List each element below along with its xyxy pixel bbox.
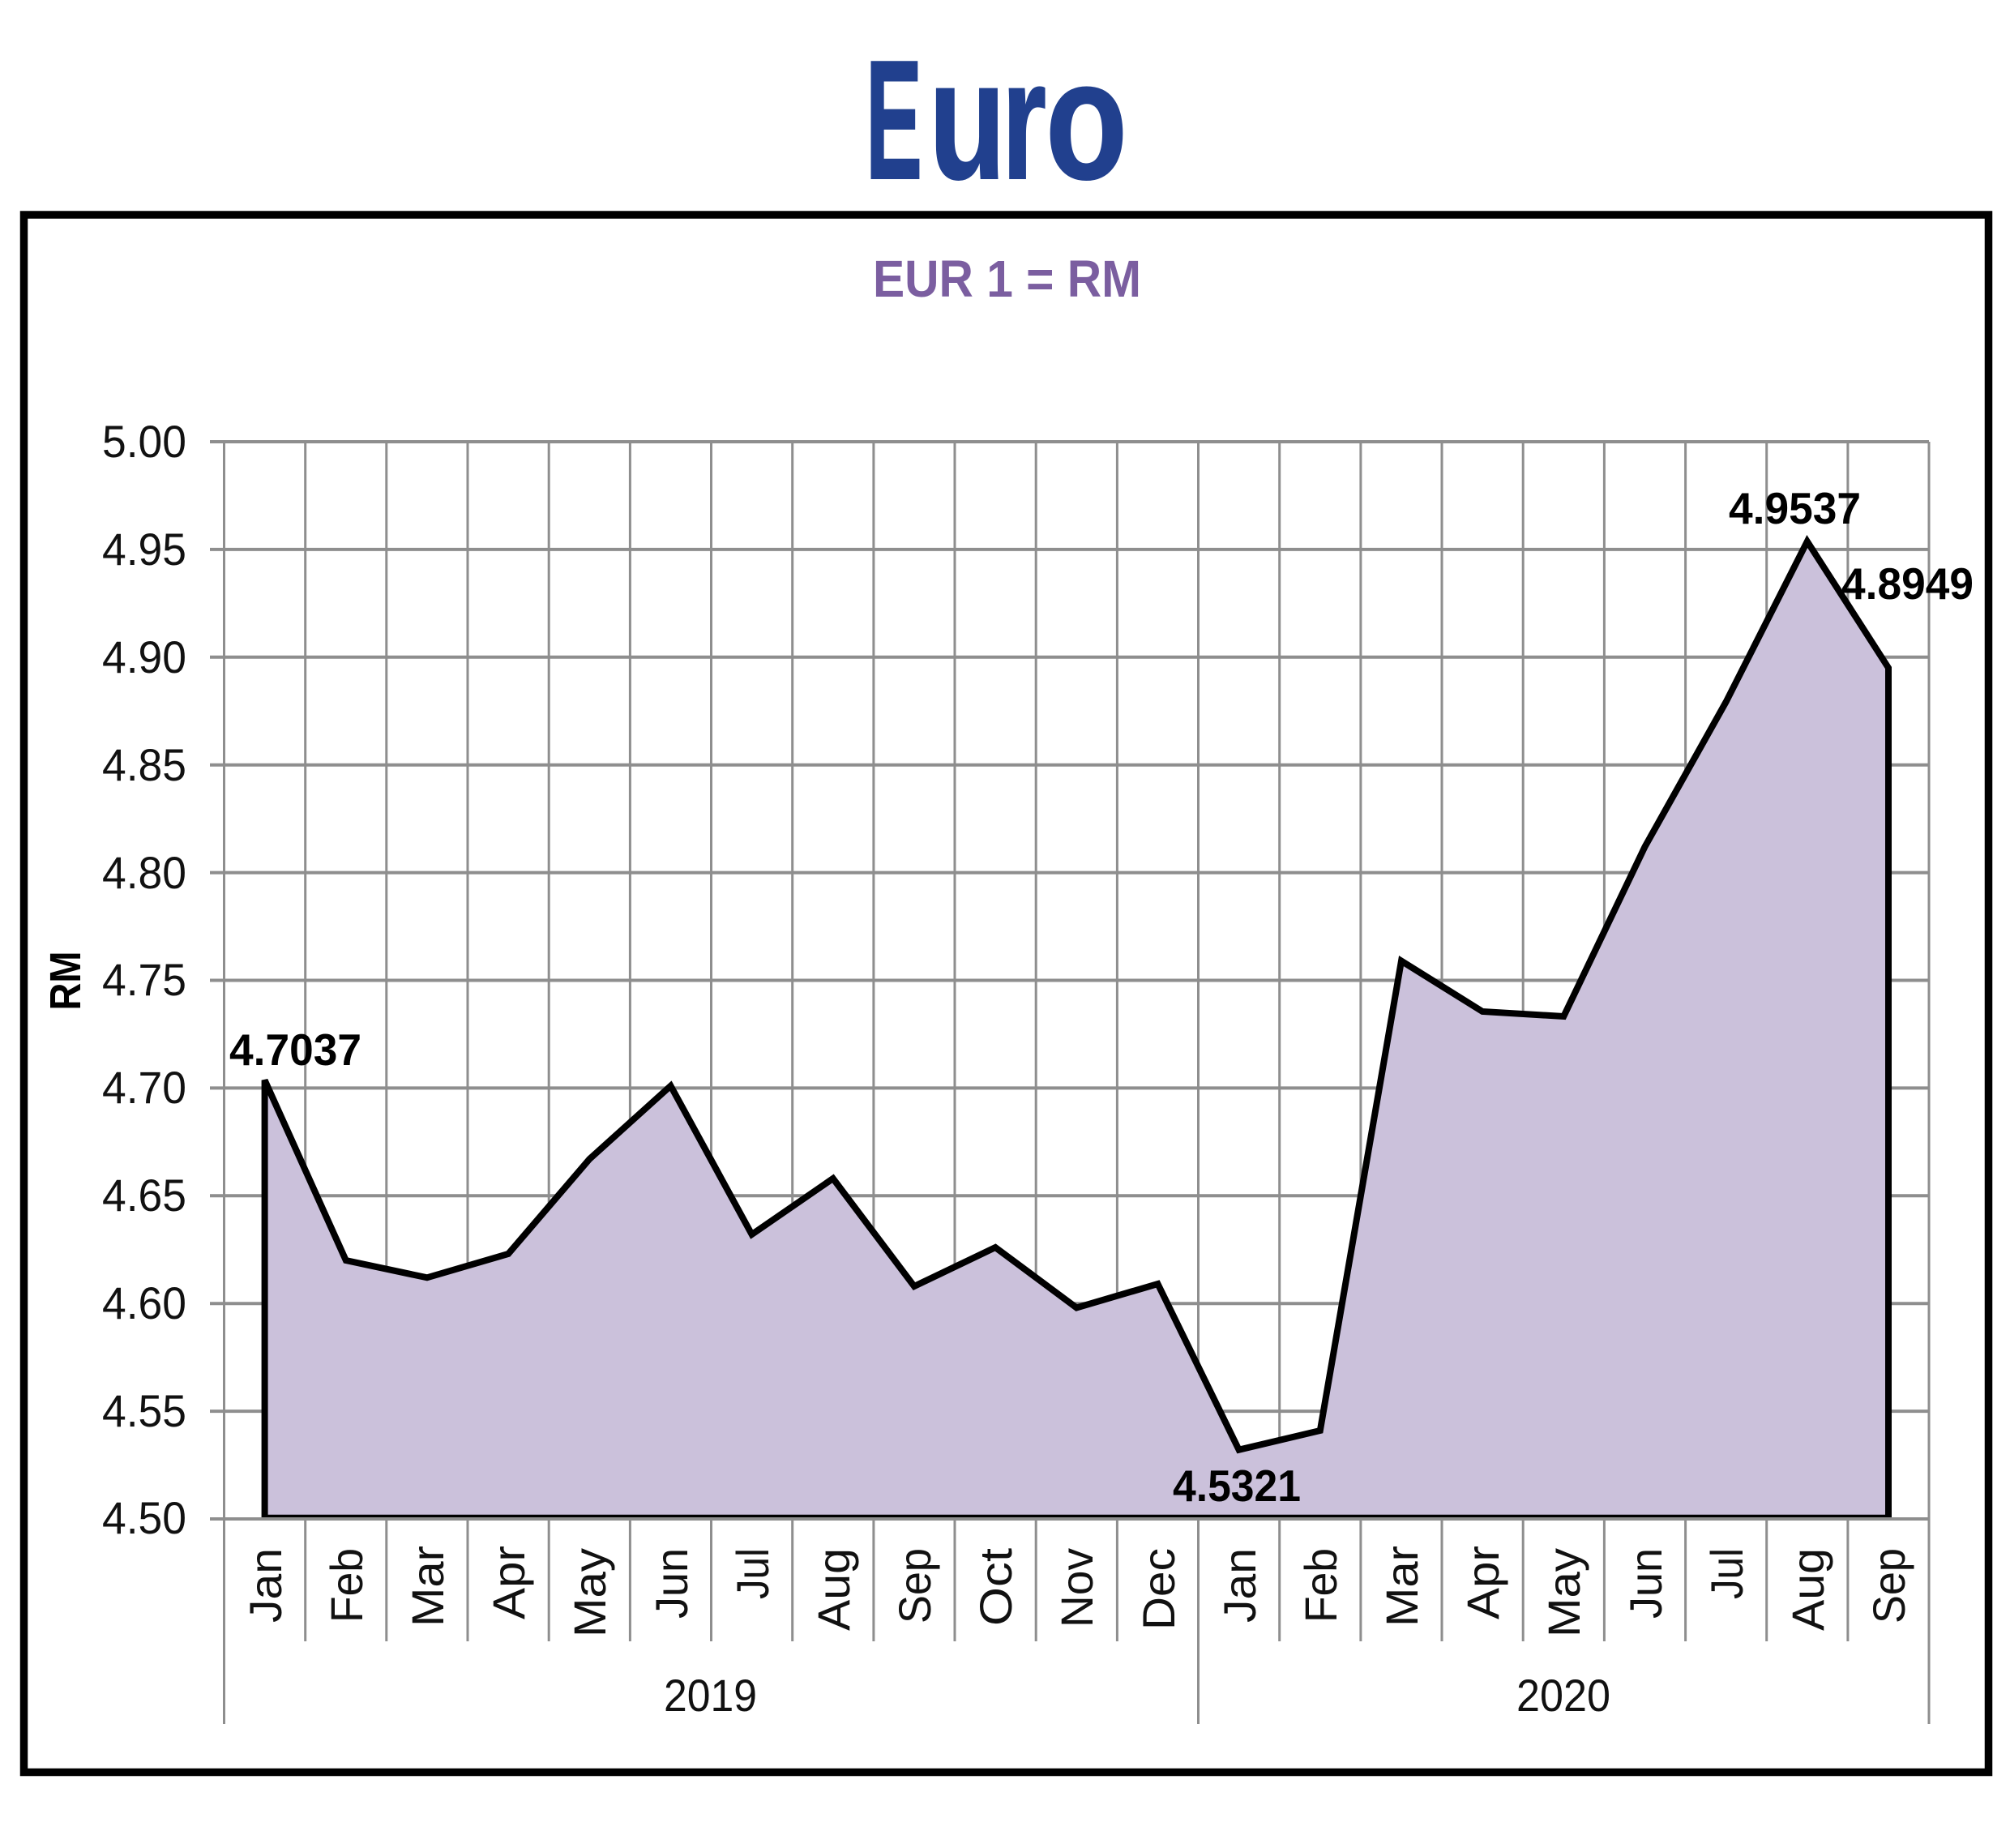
x axis month labels: Sep [889, 1548, 940, 1623]
y axis labels: 4.80 [102, 847, 186, 898]
x axis month labels: Jun [646, 1548, 697, 1619]
y axis labels: 4.70 [102, 1062, 186, 1113]
title: r [1002, 26, 1046, 215]
x axis month labels: Sep [1863, 1548, 1914, 1623]
x axis month labels: Mar [1376, 1546, 1427, 1627]
y axis labels: 4.55 [102, 1385, 186, 1436]
y axis labels: 4.85 [102, 739, 186, 790]
y axis title: RM [41, 952, 90, 1010]
x axis month labels: Aug [808, 1548, 859, 1631]
title: o [1046, 26, 1127, 215]
x axis month labels: Jan [1214, 1548, 1265, 1623]
y axis labels: 4.75 [102, 954, 186, 1005]
x axis baseline [210, 1517, 1929, 1521]
x axis month labels: Aug [1782, 1548, 1833, 1631]
x axis month labels: Jul [1701, 1548, 1752, 1599]
x axis month labels: Nov [1051, 1548, 1102, 1628]
x axis month labels: Jan [240, 1548, 291, 1623]
x axis month labels: Feb [321, 1548, 372, 1623]
y axis labels: 5.00 [102, 416, 186, 467]
x axis year labels [664, 1670, 1610, 1721]
x axis month labels: May [564, 1548, 615, 1637]
y axis labels [102, 416, 186, 1543]
chart gridlines [210, 442, 1929, 1724]
x axis month labels [240, 1546, 1914, 1637]
title: E [866, 26, 922, 215]
x axis month labels: Mar [402, 1546, 453, 1627]
x axis year labels: 2019 [664, 1670, 757, 1721]
title: u [929, 26, 1006, 215]
x axis month labels: Apr [1457, 1546, 1508, 1619]
y axis labels: 4.60 [102, 1277, 186, 1328]
y axis labels: 4.95 [102, 524, 186, 575]
x axis month labels: Jul [727, 1548, 778, 1599]
data label: Sep 2020: 4.8949 [1841, 558, 1974, 609]
subtitle: EUR 1 = RM [873, 250, 1141, 308]
y axis labels: 4.50 [102, 1492, 186, 1543]
x axis month labels: Feb [1295, 1548, 1346, 1623]
y axis labels: 4.65 [102, 1170, 186, 1221]
data label: Jan 2019: 4.7037 [229, 1025, 361, 1075]
y axis labels: 4.90 [102, 631, 186, 682]
area chart: EUR to RM rate [262, 541, 1892, 1517]
x axis month labels: Jun [1620, 1548, 1671, 1619]
data label: Jan 2020 low: 4.5321 [1173, 1461, 1301, 1511]
x axis month labels: May [1538, 1548, 1589, 1637]
x axis month labels: Oct [970, 1548, 1021, 1626]
x axis year labels: 2020 [1516, 1670, 1610, 1721]
x axis month labels: Dec [1133, 1548, 1184, 1630]
x axis month labels: Apr [483, 1546, 534, 1619]
data label: Aug 2020 high: 4.9537 [1729, 483, 1861, 533]
